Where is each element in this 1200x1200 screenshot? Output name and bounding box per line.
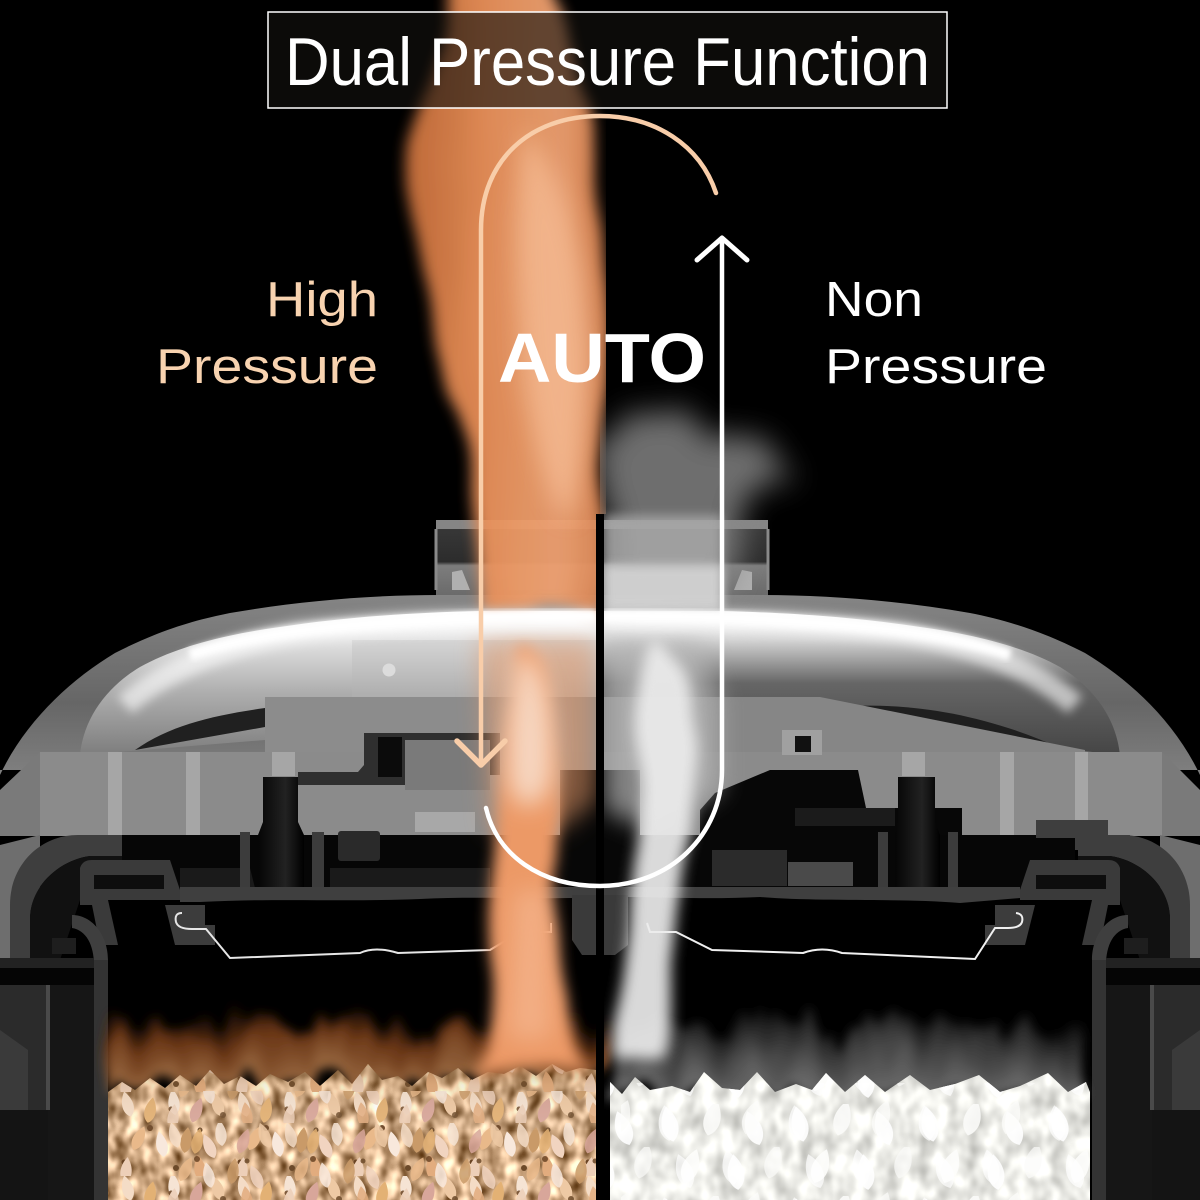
cycle arrow [457, 116, 747, 886]
label: non pressure [825, 273, 1047, 394]
white core [611, 640, 695, 1060]
light stripes [108, 752, 1088, 835]
main dark slab [122, 835, 1075, 890]
steam: white non pressure [604, 414, 800, 1060]
upper gray cloud [604, 414, 800, 600]
orange plume highlight [517, 130, 590, 520]
brown rice [108, 1064, 596, 1200]
right side wall structure [985, 835, 1200, 1200]
gray plate [180, 887, 1020, 903]
orange translucent lid wash [478, 640, 596, 830]
dark crescent left [135, 708, 265, 750]
pressure valve cap [436, 520, 768, 596]
inner window detail [352, 640, 596, 697]
cooker lid [0, 595, 1200, 836]
center divider [596, 514, 604, 1200]
center post [552, 770, 640, 882]
label: high pressure: Pressure [156, 340, 378, 394]
label: auto: AUTO [498, 319, 706, 397]
right post [895, 777, 940, 888]
center stem [572, 895, 596, 955]
white rice [610, 1072, 1090, 1200]
lid outer shell [0, 595, 600, 775]
glass interior right [600, 611, 1120, 755]
right upper block [1036, 820, 1130, 850]
lower band [40, 752, 1162, 836]
gray column over cap [604, 515, 722, 610]
orange upper plume [410, 0, 607, 612]
lid light highlight [125, 616, 1075, 705]
label: non pressure: Pressure [825, 340, 1047, 394]
orange arc and down arrow [481, 116, 716, 762]
lid seal wire left [176, 913, 551, 958]
mechanism panel left [265, 697, 600, 797]
left side wall structure [0, 835, 215, 1200]
orange lower column [468, 649, 590, 1075]
small cylinder [338, 831, 380, 861]
right black wedge [700, 770, 962, 888]
lid wash [604, 640, 720, 830]
label: high pressure: High [266, 273, 378, 327]
dark crescent right [825, 706, 1060, 748]
left post [258, 777, 304, 888]
steam rising over white rice [608, 1010, 1090, 1095]
glass interior left [80, 611, 600, 755]
label: high pressure [156, 273, 378, 394]
label: non pressure: Non [825, 273, 923, 327]
orange soft core [508, 890, 552, 1040]
black mechanism [122, 770, 1130, 955]
title box: Dual Pressure Function [285, 24, 930, 100]
mechanism panel right [600, 697, 1085, 800]
steam: orange high pressure [410, 0, 607, 1075]
recessed detail [298, 733, 500, 785]
orange pale core [507, 650, 553, 806]
lid seal wire right [647, 913, 1022, 959]
small bracket [782, 730, 822, 755]
steam rising over brown rice [108, 1010, 596, 1085]
white lower arc and up arrow [486, 242, 722, 886]
